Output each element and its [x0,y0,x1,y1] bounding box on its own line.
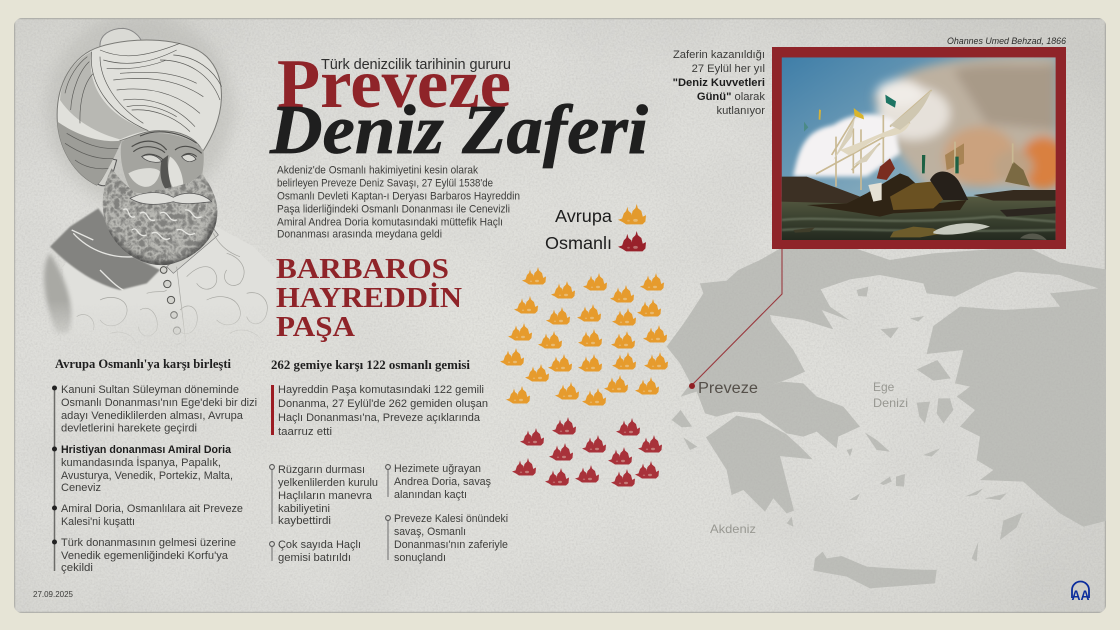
timeline text: Avusturya, Venedik, Portekiz, Malta, [61,470,233,482]
note: wind: Rüzgarın durması [278,464,365,476]
timeline text: Venedik egemenliğindeki Korfu'ya [61,550,229,562]
beard [103,168,217,265]
note: ships sunk: gemisi batırıldı [278,552,351,564]
note: Ottoman victory: savaş, Osmanlı [394,526,466,538]
face [121,133,204,195]
note: Doria fled: Hezimete uğrayan [394,463,481,475]
leader line to Preveze [693,249,782,384]
subtitle: Türk denizcilik tarihinin gururu [321,57,511,73]
timeline text [61,384,257,574]
name heading: Barbaros Hayreddin Paşa: BARBAROS [276,254,449,285]
title: Preveze: Preveze [277,46,511,123]
note: Ottoman victory [386,513,508,564]
icon: AA logo [1072,582,1090,603]
intro paragraph: Akdeniz'de Osmanlı hakimiyetini kesin olarak [277,164,478,176]
name heading: Barbaros Hayreddin Paşa: PAŞA [276,312,356,343]
timeline text: kumandasında İspanya, Papalık, [61,456,221,469]
title: Deniz Zaferi: Deniz Zaferi [269,92,649,169]
section: Europe united against the Ottomans [52,357,257,574]
intro paragraph: Osmanlı Devleti Kaptan-ı Deryası Barbaros Hayreddin [277,190,520,202]
map label: Aegean Sea: Ege [873,380,895,394]
note: Ottoman victory: sonuçlandı [394,552,446,564]
Crete [813,552,937,588]
note: Doria fled: Andrea Doria, savaş [394,476,491,488]
caption: Navy Day: kutlanıyor [716,105,765,117]
note: Doria fled [386,463,491,501]
note: Ottoman victory: Donanması'nın zaferiyle [394,539,508,551]
map label: Aegean Sea: Denizi [873,396,908,410]
painting credit: Ohannes Umed Behzad, 1866 [947,36,1067,47]
note: wind: Haçlıların manevra [278,490,373,502]
attack text: taarruz etti [278,426,332,438]
robe [64,228,276,322]
icon: AA logo: AA [1072,587,1090,603]
map label: Mediterranean: Akdeniz [710,522,756,536]
caption: Navy Day: Günü" olarak [697,91,765,103]
attack text: Haçlı Donanması'na, Preveze açıklarında [278,412,481,424]
timeline text: çekildi [61,562,93,574]
timeline text: Kalesi'ni kuşattı [61,516,135,528]
intro paragraph: Amiral Andrea Doria komutasındaki müttefik Haçlı [277,216,503,228]
caption: Navy Day [673,49,765,117]
intro paragraph: Paşa liderliğindeki Osmanlı Donanması ile Cenevizli [277,204,510,216]
note: ships sunk [270,539,361,564]
red accent bar [271,385,274,435]
attack text: Donanma, 27 Eylül'de 262 gemiden oluşan [278,398,488,410]
timeline text: devletlerini harekete geçirdi [61,422,197,434]
intro paragraph: belirleyen Preveze Deniz Savaşı, 27 Eylül 1538'de [277,178,493,190]
Peloponnese [706,416,813,513]
section heading: 262 gemiye karşı 122 osmanlı gemisi [271,358,471,372]
timeline text: Amiral Doria, Osmanlılara ait Preveze [61,503,243,515]
ear and neck [98,158,118,186]
note: wind: yelkenlilerden kurulu [278,477,378,489]
note: wind: kaybettirdi [278,515,331,527]
portrait of Barbaros Hayreddin Pasha [44,13,277,353]
name heading: Barbaros Hayreddin Paşa [276,254,462,343]
turban [100,28,142,47]
timeline [52,386,57,571]
attack text: Hayreddin Paşa komutasındaki 122 gemili [278,384,484,396]
note: ships sunk: Çok sayıda Haçlı [278,539,361,551]
timeline text: Hristiyan donanması Amiral Doria [61,444,232,456]
timeline text: Kanuni Sultan Süleyman döneminde [61,384,239,396]
painting in red frame [772,47,1067,249]
caption: Navy Day: "Deniz Kuvvetleri [673,77,765,89]
timeline text: adayı Venediklilerden alması, Avrupa [61,410,244,422]
legend: ship colours [545,204,646,253]
name heading: Barbaros Hayreddin Paşa: HAYREDDİN [276,283,462,314]
map marker: Preveze: Preveze [698,380,758,397]
timeline text: Ceneviz [61,482,101,494]
legend: ship colours: Osmanlı [545,233,612,253]
intro paragraph [277,164,520,240]
section heading: Avrupa Osmanlı'ya karşı birleşti [55,357,232,371]
map: Greece and the Aegean [667,247,1110,588]
note: Doria fled: alanından kaçtı [394,489,467,501]
note: wind: kabiliyetini [278,503,330,515]
timeline text: Türk donanmasının gelmesi üzerine [61,537,236,549]
fleet: 26 European ship icons [500,267,668,406]
caption: Navy Day: Zaferin kazanıldığı [673,49,765,61]
caption: Navy Day: 27 Eylül her yıl [692,63,765,75]
attack text [278,384,488,438]
fleet: 12 Ottoman ship icons [512,417,662,486]
date: 27.09.2025 [33,590,73,599]
legend: ship colours: Avrupa [555,206,612,226]
section: 262 ships against 122 Ottoman ships [270,358,508,564]
note: wind [270,464,378,527]
timeline text: Osmanlı Donanması'nın Ege'deki bir dizi [61,397,257,409]
heading block [269,46,649,169]
intro paragraph: Donanması arasında meydana geldi [277,228,442,240]
note: Ottoman victory: Preveze Kalesi önündeki [394,513,508,525]
map label: Aegean Sea [873,380,908,410]
